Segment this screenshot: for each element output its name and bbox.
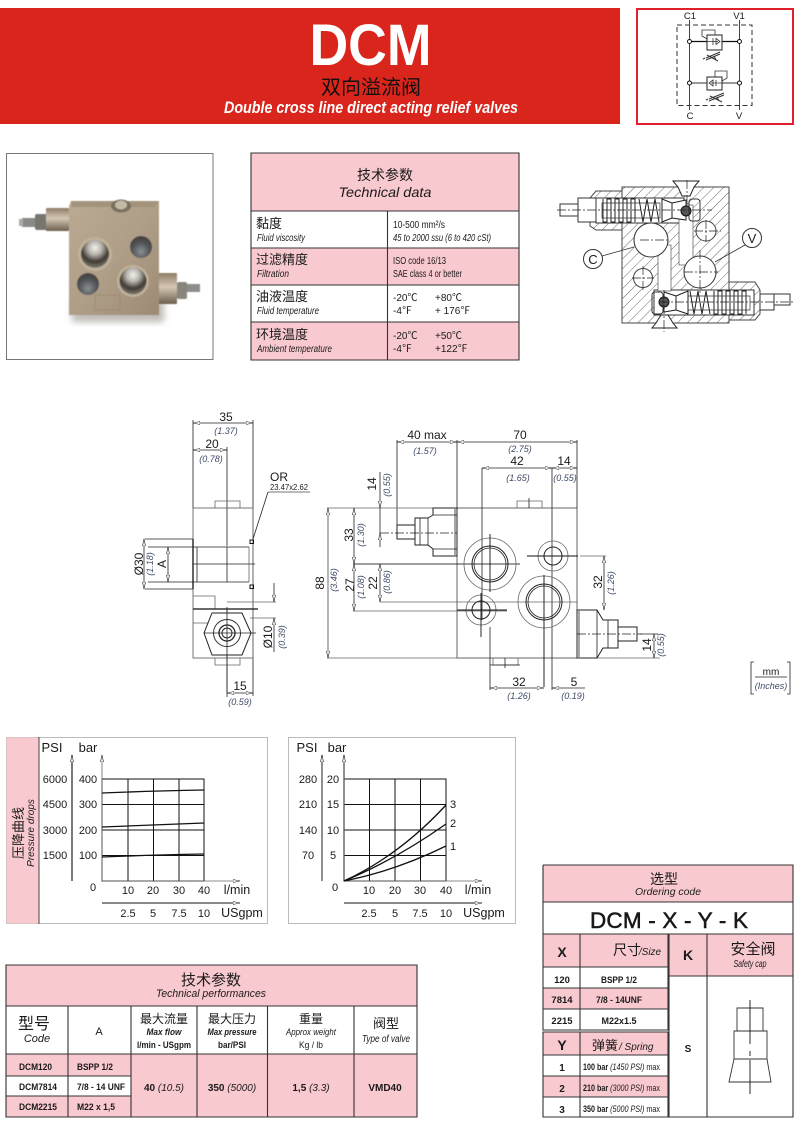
line chart: pressure vs flow: 0 xyxy=(90,882,96,894)
table heading xyxy=(156,972,266,1000)
data rows: 1,5 (3.3) xyxy=(292,1083,330,1094)
panel: pressure drop chart B: 5 xyxy=(392,908,398,920)
row: ambient temperature: +122℉ xyxy=(435,344,468,355)
front view dimension drawing: (0.55) xyxy=(382,473,392,497)
safety cap column: 安全阀 xyxy=(730,940,776,958)
data rows: DCM7814 xyxy=(19,1082,58,1093)
side view dimension drawing: (1.37) xyxy=(214,426,238,436)
spring table: 210 bar (3000 PSI) max xyxy=(583,1083,660,1094)
data rows: 7/8 - 14 UNF xyxy=(77,1082,125,1093)
row: ambient temperature: +50℃ xyxy=(435,331,462,342)
column headers: Type of valve xyxy=(362,1034,410,1045)
row: fluid temperature xyxy=(256,289,470,317)
front view dimension drawing: (0.86) xyxy=(382,570,392,594)
line chart: pressure vs flow: 2.5 xyxy=(120,908,136,920)
left relief valve xyxy=(380,508,457,556)
panel: pressure drop chart B: 2.5 xyxy=(361,908,377,920)
line chart: pressure vs flow: 3000 xyxy=(43,825,67,837)
side label: pressure drops xyxy=(6,737,39,924)
subtitle: English: Double cross line direct acting relief valves xyxy=(224,98,518,117)
column headers: Max flow xyxy=(146,1027,182,1038)
size table xyxy=(551,942,662,1027)
panel: technical data table xyxy=(251,153,519,360)
panel: pressure drop chart B: l/min xyxy=(465,883,491,897)
line chart: pressure vs flow: 30 xyxy=(173,885,185,897)
legend: mm / inches: mm xyxy=(763,667,779,678)
panel: pressure drop chart B: 15 xyxy=(327,799,339,811)
panel: hydraulic schematic xyxy=(637,9,793,124)
front view dimension drawing xyxy=(313,428,666,701)
column headers: A xyxy=(95,1026,103,1038)
panel: hydraulic schematic: C1 xyxy=(684,11,696,22)
safety cap column: K xyxy=(683,947,693,963)
panel: pressure drop chart B: USgpm xyxy=(463,906,505,920)
spring table: 弹簧 xyxy=(592,1038,618,1053)
size table: X xyxy=(557,944,567,960)
curves 1, 2, 3: 3 xyxy=(450,799,456,811)
side view dimension drawing: 20 xyxy=(205,437,219,451)
panel: pressure drop chart B: 30 xyxy=(414,885,426,897)
row: fluid temperature: -20℃ xyxy=(393,293,417,304)
front view dimension drawing: (0.19) xyxy=(561,691,585,701)
line chart: pressure vs flow: 10 xyxy=(122,885,134,897)
panel: hydraulic schematic: V1 xyxy=(733,11,745,22)
line chart: pressure vs flow: 300 xyxy=(79,799,97,811)
safety cap column: S xyxy=(685,1044,692,1055)
panel: pressure drop chart B: 210 xyxy=(299,799,317,811)
panel: pressure drop chart B: PSI xyxy=(297,740,317,755)
row: filtration: 过滤精度 xyxy=(256,252,308,267)
spring table: 100 bar (1450 PSI) max xyxy=(583,1062,660,1073)
panel: pressure drop chart A xyxy=(6,737,268,924)
row: fluid temperature: -4℉ xyxy=(393,306,412,317)
line chart: pressure vs flow: bar xyxy=(79,740,98,755)
front view dimension drawing: 42 xyxy=(510,454,524,468)
column headers: 最大压力 xyxy=(208,1012,256,1026)
panel: ordering code xyxy=(543,865,793,1117)
side view dimension drawing: (0.39) xyxy=(277,625,287,649)
line chart: pressure vs flow: 100 xyxy=(79,850,97,862)
row: fluid viscosity xyxy=(256,216,491,244)
side view dimension drawing: Ø10 xyxy=(261,625,275,648)
side view dimension drawing: (0.78) xyxy=(199,454,223,464)
data rows: VMD40 xyxy=(368,1083,402,1094)
column headers: Code xyxy=(24,1033,50,1045)
size table: 7/8 - 14UNF xyxy=(596,995,642,1006)
curves 1, 2, 3: 2 xyxy=(450,818,456,830)
panel: pressure drop chart B: 70 xyxy=(302,850,314,862)
data rows: M22 x 1,5 xyxy=(77,1102,116,1113)
row: filtration: SAE class 4 or better xyxy=(393,269,462,280)
front view dimension drawing: (2.75) xyxy=(508,444,532,454)
panel: technical performances table xyxy=(6,965,417,1117)
panel: pressure drop chart B: 5 xyxy=(330,850,336,862)
line chart: pressure vs flow: PSI xyxy=(42,740,62,755)
panel: pressure drop chart B: bar xyxy=(328,740,347,755)
line chart: pressure vs flow: 6000 xyxy=(43,774,67,786)
row: fluid viscosity: Fluid viscosity xyxy=(257,233,306,244)
column headers: Max pressure xyxy=(208,1027,257,1038)
side view dimension drawing: OR xyxy=(270,470,288,484)
front view dimension drawing: 14 xyxy=(365,477,379,491)
line chart: pressure vs flow: 5 xyxy=(150,908,156,920)
front view dimension drawing: (3.46) xyxy=(329,568,339,592)
row: fluid temperature: Fluid temperature xyxy=(257,306,319,317)
panel: hydraulic schematic: V xyxy=(736,111,743,122)
front view dimension drawing: 27 xyxy=(343,578,357,592)
row: fluid temperature: 油液温度 xyxy=(256,289,308,304)
panel: pressure drop chart B: 0 xyxy=(332,882,338,894)
line chart: pressure vs flow: 4500 xyxy=(43,799,67,811)
spring table: / Spring xyxy=(618,1042,654,1053)
column headers: 阀型 xyxy=(373,1016,399,1031)
size table: M22x1.5 xyxy=(602,1016,637,1027)
line chart: pressure vs flow: 10 xyxy=(198,908,210,920)
table heading: Technical performances xyxy=(156,988,266,1000)
line chart: pressure vs flow: 7.5 xyxy=(171,908,187,920)
panel: product photo xyxy=(6,154,213,360)
curves 1, 2, 3: 1 xyxy=(450,841,456,853)
subtitle: Chinese: 双向溢流阀 xyxy=(321,76,421,99)
callout: port V: V xyxy=(748,231,757,246)
line chart: pressure vs flow: 20 xyxy=(147,885,159,897)
legend: mm / inches: (Inches) xyxy=(755,681,787,691)
front view dimension drawing: (1.26) xyxy=(606,571,616,595)
legend: mm / inches xyxy=(751,662,790,694)
line chart: pressure vs flow xyxy=(42,740,263,920)
spring table: 1 xyxy=(559,1063,565,1074)
size table: /Size xyxy=(638,947,662,958)
side view dimension drawing: (1.18) xyxy=(145,552,155,576)
size table: BSPP 1/2 xyxy=(601,975,637,986)
panel: pressure drop chart B: 20 xyxy=(327,774,339,786)
front view dimension drawing: 14 xyxy=(640,638,654,652)
front view dimension drawing: (1.57) xyxy=(413,446,437,456)
table heading: 技术参数 xyxy=(181,972,241,989)
callout: port C xyxy=(584,247,634,268)
row: ambient temperature: Ambient temperature xyxy=(256,344,332,355)
side view dimension drawing: (0.59) xyxy=(228,697,252,707)
table heading: 技术参数 xyxy=(357,167,413,183)
front view dimension drawing: 33 xyxy=(342,528,356,542)
front view dimension drawing: (1.65) xyxy=(506,473,530,483)
side view dimension drawing: 23.47x2.62 xyxy=(270,483,309,492)
size table: 2215 xyxy=(551,1016,573,1027)
photo: valve block xyxy=(19,200,200,322)
front view dimension drawing: 32 xyxy=(512,675,526,689)
heading: 选型 xyxy=(650,871,678,887)
data rows: BSPP 1/2 xyxy=(77,1062,113,1073)
row: fluid viscosity: 45 to 2000 ssu (6 to 420 cSt) xyxy=(393,233,491,244)
data rows: 40 (10.5) xyxy=(144,1083,184,1094)
size table: 尺寸 xyxy=(613,942,641,958)
line chart: pressure vs flow: 1500 xyxy=(43,850,67,862)
line chart: pressure vs flow: 400 xyxy=(79,774,97,786)
column headers: Kg / lb xyxy=(299,1040,323,1051)
panel: pressure drop chart B: 280 xyxy=(299,774,317,786)
panel: pressure drop chart B: 40 xyxy=(440,885,452,897)
data rows: DCM120 xyxy=(19,1062,52,1073)
front view dimension drawing: 22 xyxy=(366,576,380,590)
safety cap column: Safety cap xyxy=(734,959,767,970)
row: ambient temperature: -20℃ xyxy=(393,331,417,342)
row: fluid temperature: +80℃ xyxy=(435,293,462,304)
side view dimension drawing: Ø30 xyxy=(132,552,146,575)
side view dimension drawing: 35 xyxy=(219,410,233,424)
panel: pressure drop chart B: 7.5 xyxy=(412,908,428,920)
size table: 120 xyxy=(554,975,570,986)
data rows: 350 (5000) xyxy=(208,1083,256,1094)
column headers: 重量 xyxy=(299,1012,323,1026)
side label: pressure drops: 压降曲线 xyxy=(11,807,26,859)
front view dimension drawing: (1.26) xyxy=(507,691,531,701)
side view dimension drawing xyxy=(132,410,310,707)
spring table xyxy=(557,1037,660,1116)
row: fluid viscosity: 10-500 mm²/s xyxy=(393,220,445,231)
table heading: Technical data xyxy=(338,184,432,200)
row: filtration xyxy=(256,252,462,280)
icon: safety cap xyxy=(729,1000,771,1094)
front view dimension drawing: 40 max xyxy=(407,428,447,442)
column headers: bar/PSI xyxy=(218,1040,246,1051)
callout: port V xyxy=(715,228,762,262)
front view dimension drawing: 14 xyxy=(557,454,571,468)
column headers: 最大流量 xyxy=(140,1012,188,1026)
panel: pressure drop chart B xyxy=(288,738,516,924)
front view dimension drawing: 5 xyxy=(571,675,578,689)
panel: pressure drop chart B: 10 xyxy=(363,885,375,897)
row: fluid temperature: + 176℉ xyxy=(435,306,470,317)
front view dimension drawing: (1.30) xyxy=(356,523,366,547)
panel: pressure drop chart B: 140 xyxy=(299,825,317,837)
spring table: 350 bar (5000 PSI) max xyxy=(583,1104,660,1115)
panel: pressure drop chart B: 10 xyxy=(327,825,339,837)
spring table: Y xyxy=(557,1037,567,1053)
right relief valve xyxy=(577,610,642,658)
code: DCM-X-Y-K: DCM - X - Y - K xyxy=(590,908,748,933)
row: fluid viscosity: 黏度 xyxy=(256,216,282,231)
size table: 7814 xyxy=(551,995,573,1006)
front view dimension drawing: 70 xyxy=(513,428,527,442)
front view dimension drawing: (0.55) xyxy=(553,473,577,483)
row: filtration: Filtration xyxy=(257,269,289,280)
front view dimension drawing: (1.08) xyxy=(356,575,366,599)
heading: Ordering code xyxy=(635,886,701,898)
row: ambient temperature: 环境温度 xyxy=(256,327,308,342)
line chart: pressure vs flow: 40 xyxy=(198,885,210,897)
spring table: 2 xyxy=(559,1084,565,1095)
side view dimension drawing: A xyxy=(155,560,169,568)
spring table: 3 xyxy=(559,1105,565,1116)
callout: port C: C xyxy=(588,252,598,267)
panel: title banner xyxy=(0,8,620,124)
panel: pressure drop chart B: 10 xyxy=(440,908,452,920)
row: ambient temperature: -4℉ xyxy=(393,344,412,355)
data rows xyxy=(19,1062,402,1113)
front view dimension drawing: (0.55) xyxy=(656,633,666,657)
column headers xyxy=(18,1012,410,1051)
side label: pressure drops: Pressure drops xyxy=(26,799,37,867)
panel: pressure drop chart B: 20 xyxy=(389,885,401,897)
line chart: pressure vs flow: l/min xyxy=(224,883,250,897)
column headers: Approx weight xyxy=(285,1027,336,1038)
sectional drawing of valve xyxy=(557,180,793,332)
safety cap column xyxy=(683,940,776,1094)
front view dimension drawing: 88 xyxy=(313,576,327,590)
column headers: l/min - USgpm xyxy=(137,1040,191,1051)
table heading xyxy=(338,167,432,200)
front view dimension drawing: 32 xyxy=(591,575,605,589)
line chart: pressure vs flow: 200 xyxy=(79,825,97,837)
row: filtration: ISO code 16/13 xyxy=(393,256,446,267)
line chart: pressure vs flow: USgpm xyxy=(221,906,263,920)
column headers: 型号 xyxy=(18,1015,50,1033)
curves 1, 2, 3 xyxy=(344,799,456,881)
row: ambient temperature xyxy=(256,327,468,355)
data rows: DCM2215 xyxy=(19,1102,58,1113)
side view dimension drawing: 15 xyxy=(233,679,247,693)
title: DCM: DCM xyxy=(310,13,432,78)
heading xyxy=(635,871,701,898)
panel: hydraulic schematic: C xyxy=(687,111,694,122)
